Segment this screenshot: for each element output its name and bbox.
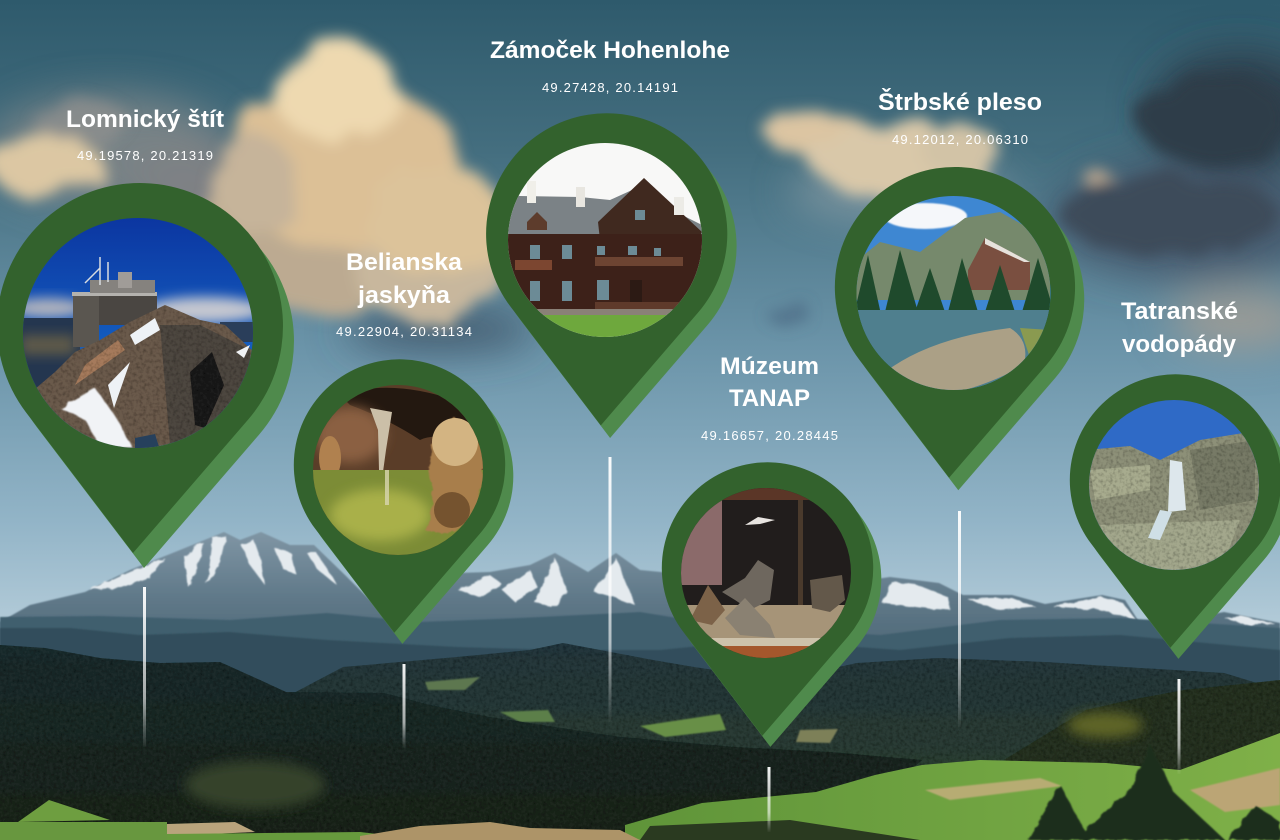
heading line one: Múzeum (720, 353, 819, 380)
background: valley fields (425, 677, 1180, 755)
pin body (294, 359, 505, 633)
background: middle forest ridge (290, 643, 1280, 800)
background: dark foreground forest (0, 645, 922, 840)
pin shadow shape (844, 180, 1084, 490)
heading: Lomnický štít (66, 106, 224, 133)
connector line: Lomnický štít (143, 587, 146, 747)
background: distant blue hills (0, 612, 1280, 740)
coordinates: 49.16657, 20.28445 (701, 428, 838, 443)
label: Múzeum TANAP (701, 353, 838, 443)
background: olive patch on right hill (1067, 712, 1143, 738)
photo: museum diorama with wolves (678, 485, 854, 661)
photo: waterfall on a rock wall (1086, 398, 1262, 575)
background: olive tree patch (185, 761, 325, 809)
heading line two: vodopády (1122, 331, 1237, 358)
photo: wooden manor house (505, 140, 705, 340)
coordinates: 49.22904, 20.31134 (336, 324, 472, 339)
pin shadow shape (670, 473, 881, 747)
label: Belianska jaskyňa (336, 249, 472, 339)
photo: observatory on the summit (23, 218, 253, 448)
label: Lomnický štít (66, 106, 224, 163)
heading line one: Belianska (346, 249, 463, 276)
label: Zámoček Hohenlohe (490, 37, 730, 95)
pin shadow shape (8, 198, 294, 568)
pin body (662, 462, 873, 736)
heading line one: Tatranské (1121, 298, 1238, 325)
pin shadow shape (302, 370, 513, 644)
pin body (0, 183, 283, 553)
icon: foreground spruce tree (1028, 745, 1280, 840)
pin body (486, 113, 727, 425)
pin: Lomnický štít (0, 183, 294, 568)
coordinates: 49.12012, 20.06310 (892, 132, 1028, 147)
background: clouds (0, 40, 1280, 352)
pin: Múzeum TANAP (662, 462, 881, 747)
connector line: Múzeum TANAP (768, 767, 770, 832)
photo: lake, hotel and mountains (855, 194, 1054, 395)
photo: cave lake with stalactites (310, 383, 486, 560)
label: Tatranské vodopády (1121, 298, 1238, 358)
heading: Štrbské pleso (878, 88, 1042, 116)
pin shadow shape (1078, 385, 1280, 659)
heading line two: jaskyňa (357, 282, 451, 309)
background: right hillside forest (1004, 680, 1280, 775)
coordinates: 49.19578, 20.21319 (77, 148, 213, 163)
background: green meadows (0, 733, 1280, 840)
pin: Zámoček Hohenlohe (486, 113, 737, 438)
pin: Belianska jaskyňa (294, 359, 513, 644)
pin: Tatranské vodopády (1070, 374, 1280, 659)
label: Štrbské pleso (878, 88, 1042, 147)
connector line: Zámoček Hohenlohe (608, 457, 612, 722)
heading: Zámoček Hohenlohe (490, 37, 730, 64)
connector line: Belianska jaskyňa (402, 664, 406, 748)
pin shadow shape (495, 126, 737, 438)
connector line: Tatranské vodopády (1178, 679, 1180, 774)
coordinates: 49.27428, 20.14191 (542, 80, 678, 95)
pin body (835, 167, 1075, 478)
pin body (1070, 374, 1280, 648)
background: snowy Tatra mountains (0, 532, 1280, 680)
pin: Štrbské pleso (835, 167, 1084, 490)
heading line two: TANAP (729, 385, 810, 412)
connector line: Štrbské pleso (958, 511, 961, 727)
